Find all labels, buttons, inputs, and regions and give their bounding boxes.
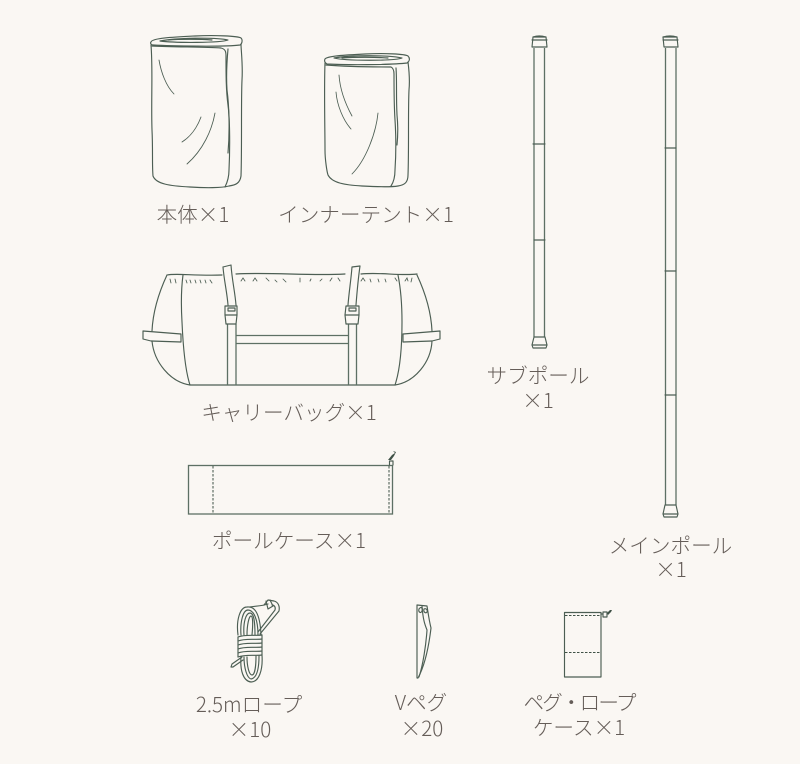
label: main pole: メインポール [609, 529, 732, 559]
label: rope: 2.5mロープ [196, 688, 303, 718]
icon: V peg [417, 605, 431, 678]
label: main pole [609, 529, 732, 583]
label: pole case: ポールケース×1 [212, 524, 366, 554]
icon: pole case [188, 451, 396, 514]
label: peg and rope case [524, 686, 637, 741]
label: inner tent: インナーテント×1 [278, 198, 454, 228]
label: V peg: ×20 [401, 712, 443, 742]
label: V peg: Vペグ [395, 686, 447, 716]
label: V peg [395, 686, 447, 742]
icon: sub pole [532, 36, 547, 348]
label: sub pole [487, 359, 589, 414]
label: peg and rope case: ケース×1 [533, 711, 625, 741]
label: main tent: 本体×1 [157, 198, 229, 228]
label: sub pole: ×1 [522, 384, 554, 414]
label: sub pole: サブポール [487, 359, 589, 389]
icon: inner tent roll [325, 54, 409, 187]
icon: peg and rope case [564, 610, 612, 677]
label: main pole: ×1 [655, 553, 687, 583]
label: carry bag: キャリーバッグ×1 [201, 396, 377, 426]
icon: rope [231, 600, 279, 682]
label: rope: ×10 [229, 713, 271, 743]
icon: main tent body roll [151, 36, 242, 188]
icon: main pole [663, 36, 678, 517]
label: rope [196, 688, 303, 743]
icon: carry bag [143, 265, 440, 385]
label: peg and rope case: ペグ・ロープ [524, 686, 637, 716]
